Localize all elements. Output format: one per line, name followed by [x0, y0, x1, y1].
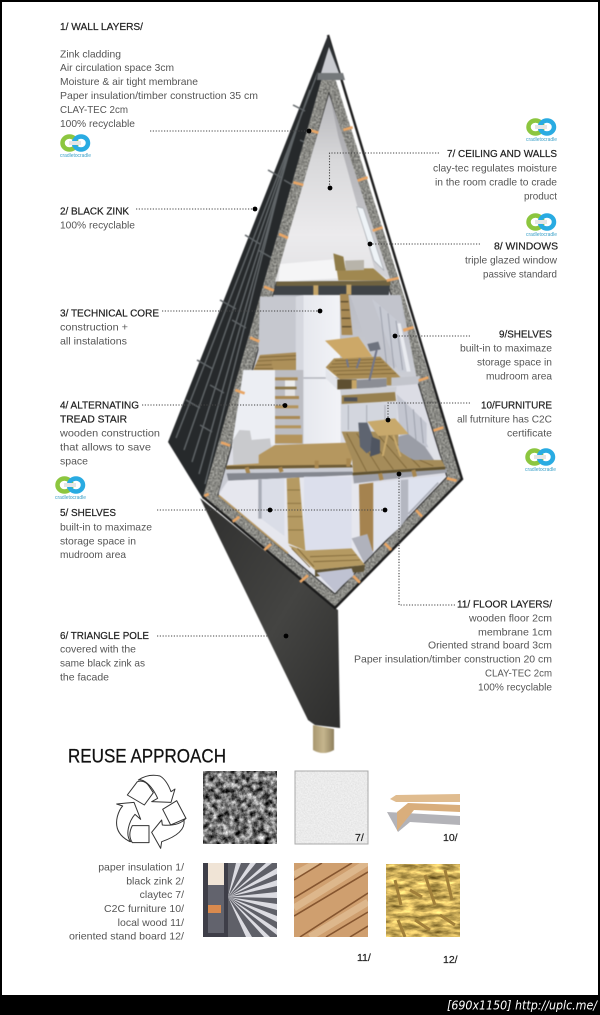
material list: black zink 2/	[126, 876, 184, 888]
wall build-up ring	[203, 78, 462, 608]
label 10: furniture: certificate	[507, 428, 552, 440]
right panel	[373, 480, 401, 552]
label 2: black zink: 100% recyclable	[60, 220, 135, 232]
icon: cradle to cradle: cradletocradle	[526, 137, 557, 143]
label 8: windows: 8/ WINDOWS	[494, 240, 558, 252]
material list: claytec 7/	[140, 889, 184, 901]
kitchen	[340, 387, 397, 433]
label 8: windows: passive standard	[483, 268, 557, 280]
label 6: triangle pole: 6/ TRIANGLE POLE	[60, 630, 149, 642]
leader lines	[136, 129, 480, 638]
label 6: triangle pole: the facade	[60, 672, 109, 684]
lower stair	[287, 477, 305, 551]
main living floor	[227, 443, 352, 467]
label 4: alternating tread stair: wooden construction	[59, 428, 160, 440]
swatch: black zink	[203, 863, 277, 937]
floor band left	[218, 458, 353, 494]
dining floor	[342, 432, 445, 474]
swatch captions	[357, 952, 458, 966]
lower level room	[219, 475, 447, 592]
label 11: floor layers	[354, 598, 552, 694]
label 9: shelves: 9/SHELVES	[499, 328, 552, 340]
label 9: shelves	[460, 328, 552, 382]
label 9: shelves: built-in to maximaze	[460, 342, 552, 354]
swatch captions: 12/	[443, 954, 458, 966]
mid level back wall	[253, 295, 417, 390]
swatch captions: 11/	[357, 952, 371, 964]
icon: cradle to cradle	[526, 120, 557, 143]
timber studs	[264, 127, 413, 330]
swatch: clay-tec plaster: 7/	[355, 832, 364, 844]
label 11: floor layers: CLAY-TEC 2cm	[485, 668, 552, 680]
label 10: furniture	[457, 400, 552, 440]
label 6: triangle pole: covered with the	[60, 644, 136, 656]
label 3: technical core	[60, 308, 159, 348]
cutaway house section	[168, 35, 462, 753]
triangle pole	[200, 498, 340, 728]
chairs	[358, 423, 380, 457]
label 11: floor layers: membrane 1cm	[478, 626, 552, 638]
material list: paper insulation 1/	[98, 862, 184, 874]
wooden post	[313, 725, 334, 753]
tan edge on lower wall	[219, 495, 288, 553]
label 3: technical core: construction +	[60, 322, 128, 334]
upper stair	[340, 294, 353, 335]
void below floor	[317, 568, 354, 592]
label 1: wall layers: Paper insulation/timber construction 35 cm	[60, 90, 258, 102]
swatch: oriented strand board	[386, 864, 460, 937]
label 1: wall layers	[60, 21, 258, 130]
swatch: local wood	[294, 862, 368, 937]
icon: cradle to cradle: cradletocradle	[60, 153, 91, 159]
label 3: technical core: 3/ TECHNICAL CORE	[60, 308, 159, 320]
lower levels	[218, 294, 447, 592]
sofa	[233, 430, 272, 465]
label 4: alternating tread stair: TREAD STAIR	[60, 414, 127, 426]
label 1: wall layers: Zink cladding	[60, 48, 121, 60]
material list: C2C furniture 10/	[104, 903, 184, 915]
swatch: clay-tec plaster	[295, 771, 368, 844]
label 4: alternating tread stair: space	[60, 456, 88, 468]
label 4: alternating tread stair	[59, 400, 160, 468]
icon: cradle to cradle	[60, 136, 91, 159]
timber loft floor	[333, 253, 387, 281]
label 7: ceiling and walls: 7/ CEILING AND WALLS	[447, 148, 557, 160]
label 11: floor layers: 100% recyclable	[478, 682, 552, 694]
mid landing	[253, 352, 296, 370]
lower right wall	[397, 394, 442, 460]
label 7: ceiling and walls: product	[524, 190, 557, 202]
label 11: floor layers: Oriented strand board 3cm	[428, 640, 552, 652]
right shelving wall	[372, 298, 411, 372]
icon: cradle to cradle: cradletocradle	[526, 232, 557, 238]
black right edge	[203, 35, 462, 608]
icon: cradle to cradle: cradletocradle	[55, 495, 86, 501]
floor joists	[273, 281, 391, 296]
label 1: wall layers: 100% recyclable	[60, 118, 135, 130]
label 7: ceiling and walls	[433, 148, 557, 202]
label 6: triangle pole: same black zink as	[60, 658, 145, 670]
label 1: wall layers: Moisture & air tight membrane	[60, 76, 198, 88]
upper table	[325, 337, 381, 381]
icon: cradle to cradle	[55, 478, 86, 501]
basement sofa	[352, 534, 373, 563]
label 5: shelves	[60, 507, 152, 561]
icon: cradle to cradle	[525, 450, 556, 473]
material list: oriented stand board 12/	[69, 930, 184, 942]
technical core	[296, 295, 341, 444]
shelf platform	[326, 357, 420, 389]
label 5: shelves: 5/ SHELVES	[60, 507, 116, 519]
interior room outline	[218, 93, 447, 594]
label 5: shelves: built-in to maximaze	[60, 522, 152, 534]
white cabinet	[232, 370, 275, 447]
label 2: black zink	[60, 206, 135, 232]
floor band right	[353, 467, 447, 483]
label 7: ceiling and walls: clay-tec regulates moisture	[433, 162, 557, 174]
wooden door	[359, 483, 373, 552]
material list	[69, 862, 184, 942]
label 2: black zink: 2/ BLACK ZINK	[60, 206, 129, 218]
black zinc facade	[168, 35, 328, 499]
white columns	[258, 477, 352, 551]
label 1: wall layers: 1/ WALL LAYERS/	[60, 21, 143, 33]
label 5: shelves: mudroom area	[60, 549, 126, 561]
roof tip	[316, 35, 345, 80]
sloped side wall	[330, 97, 391, 281]
label 9: shelves: mudroom area	[486, 370, 552, 382]
icon: cradle to cradle	[526, 216, 557, 238]
bed	[278, 259, 338, 282]
alternating tread stair	[275, 370, 303, 444]
material list: local wood 11/	[118, 917, 184, 929]
label 1: wall layers: CLAY-TEC 2cm	[60, 104, 128, 116]
label 4: alternating tread stair: that allows to save	[60, 442, 151, 454]
label 8: windows	[465, 240, 558, 280]
label 4: alternating tread stair: 4/ ALTERNATING	[60, 400, 139, 412]
label 6: triangle pole	[60, 630, 149, 684]
dining table	[367, 418, 409, 457]
label 5: shelves: storage space in	[60, 536, 136, 548]
label 7: ceiling and walls: in the room cradle to crade	[435, 176, 557, 188]
label 1: wall layers: Air circulation space 3cm	[60, 62, 174, 74]
swatch: C2C furniture: 10/	[443, 832, 458, 844]
label 11: floor layers: 11/ FLOOR LAYERS/	[457, 598, 552, 610]
label 8: windows: triple glazed window	[465, 254, 557, 266]
label 11: floor layers: wooden floor 2cm	[468, 612, 552, 624]
icon: cradle to cradle: cradletocradle	[525, 467, 556, 473]
label 11: floor layers: Paper insulation/timber construction 20 cm	[354, 654, 552, 666]
swatch: C2C furniture	[387, 794, 460, 844]
upper bedroom level	[273, 94, 391, 296]
label 10: furniture: 10/FURNITURE	[481, 400, 552, 412]
label 10: furniture: all futrniture has C2C	[457, 414, 552, 426]
lower timber studs	[204, 327, 457, 583]
swatch: paper insulation	[203, 771, 277, 844]
heading: reuse approach: REUSE APPROACH	[68, 746, 226, 768]
bench	[398, 434, 434, 460]
label 9: shelves: storage space in	[477, 356, 552, 368]
bottom wooden floor	[288, 545, 365, 577]
label 3: technical core: all instalations	[60, 336, 127, 348]
window	[357, 207, 384, 271]
icon: recycling arrows	[117, 775, 186, 848]
